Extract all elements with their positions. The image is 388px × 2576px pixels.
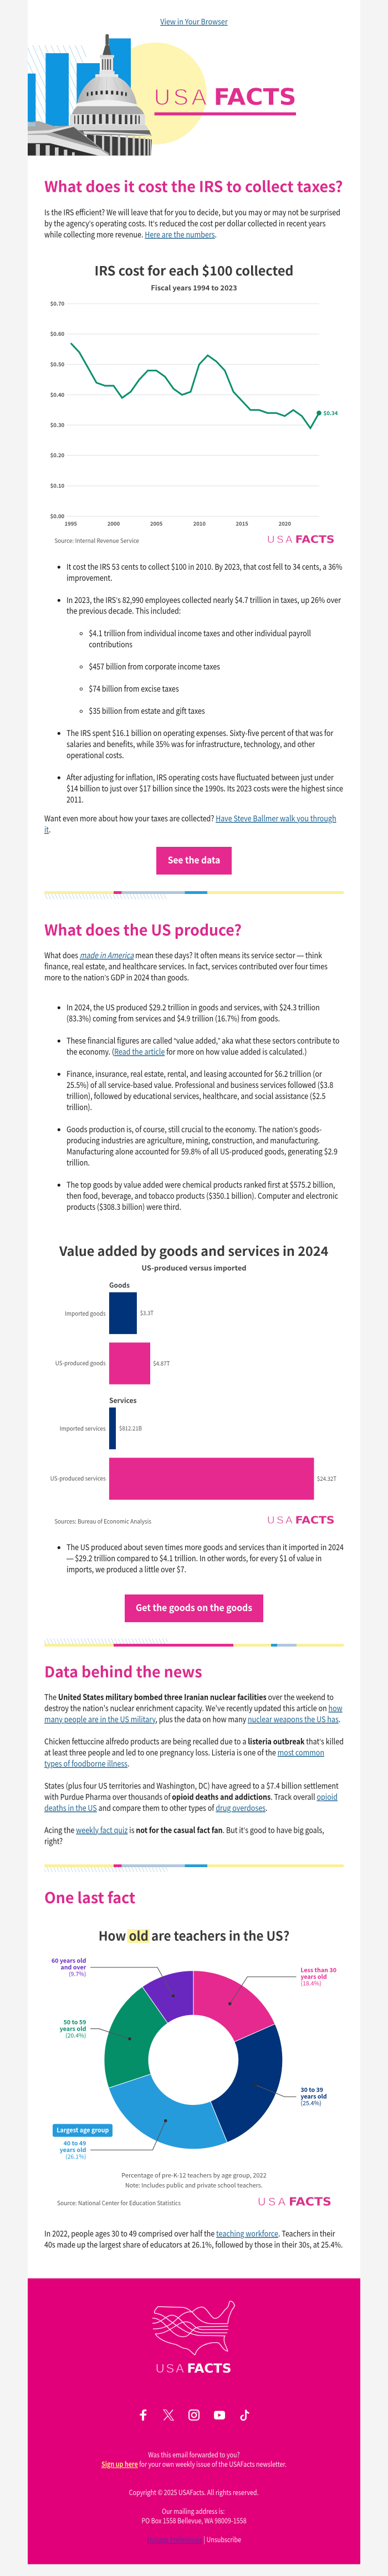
logo: USAFacts: USA: [154, 84, 207, 110]
footer text: address: PO Box 1558 Bellevue, WA 98009-1558: [141, 2515, 247, 2526]
bullet list: trillion).: [67, 1101, 92, 1113]
logo: USAFacts small: USA: [258, 2196, 286, 2209]
section: One last fact: [44, 1886, 343, 2250]
label: 30 to 39: 30 to 39: [300, 2086, 323, 2094]
news item: Iran: many people are in the US military, plus the data on how many nuclear weapons the US has.: [44, 1714, 340, 1725]
closing text: 40s made up the largest share of educators at 26.1%, followed by those in their 30s, at 25.4%.: [44, 2239, 343, 2250]
news item: listeria: types of foodborne illness.: [44, 1758, 130, 1769]
footer text: address: Our mailing address is:: [162, 2506, 224, 2516]
source: Source: Internal Revenue Service: [54, 537, 139, 545]
news item: listeria: Chicken fettuccine alfredo products are being recalled due to a listeria outbreak that’s killed: [44, 1736, 344, 1747]
label: 50 to 59: years old: [60, 2025, 86, 2033]
intro text: by the agency’s operating costs. It’s reduced the cost per dollar collected in recent years: [44, 217, 326, 229]
news item: listeria: [44, 1736, 344, 1769]
bullet list: [58, 561, 343, 805]
label: 50 to 59: 50 to 59: [64, 2018, 86, 2026]
bullet list: Manufacturing alone accounted for 59.8% of all US-produced goods, generating $2.9: [67, 1146, 338, 1157]
chart title: How old are teachers in the US?: [99, 1926, 289, 1945]
news item: quiz: Acing the weekly fact quiz is not for the casual fact fan. But it’s good to have big goals,: [44, 1824, 324, 1836]
source: Source: National Center for Education Statistics: [57, 2199, 181, 2207]
end point marker: [316, 411, 321, 416]
bullet list: operational costs.: [67, 749, 124, 761]
label: 40 to 49: years old: [60, 2146, 86, 2154]
y axis labels: $0.00: [50, 512, 65, 520]
bullet list: It cost the IRS 53 cents to collect $100 in 2010. By 2023, that cost fell to 34 cents, a 36%: [67, 561, 342, 573]
logo: USAFacts small: FACTS: [289, 2195, 331, 2209]
intro text: [44, 206, 340, 240]
label: 30 to 39: (25.4%): [300, 2099, 321, 2107]
heading: What does the US produce?: [44, 918, 242, 940]
news item: quiz: [44, 1824, 324, 1847]
bar: imported services: [60, 1408, 142, 1449]
bullet: — $29.2 trillion compared to $4.1 trillion. In other words, for every $1 of value in: [67, 1552, 321, 1564]
label: less than 30: [300, 1966, 336, 1987]
bullet list: These financial figures are called “value added,” aka what these sectors contribute to: [67, 1035, 340, 1046]
line chart: IRS cost for each $100 collected: [50, 260, 338, 546]
bullet list: Goods production is, of course, still crucial to the economy. The nation’s goods-: [67, 1123, 321, 1135]
bullet list: trillion), followed by educational services, healthcare, and social assistance ($2.5: [67, 1090, 326, 1102]
x axis labels: 1995: [64, 519, 77, 527]
source: Sources: Bureau of Economic Analysis: [54, 1517, 151, 1526]
donut segments: [104, 1971, 283, 2149]
label: 40 to 49: 40 to 49: [64, 2139, 86, 2148]
label: 30 to 39: years old: [300, 2092, 327, 2100]
logo: USAFacts small: FACTS: [295, 534, 335, 546]
chart title: IRS cost for each $100 collected: [94, 260, 294, 279]
end value label: $0.34: [324, 409, 338, 417]
bullet list: $14 billion to just over $17 billion since the 1990s. Its 2023 costs were the highest since: [67, 783, 343, 794]
title highlight: [127, 1929, 150, 1943]
bullet list: contributions: [89, 638, 132, 650]
bullet list: In 2023, the IRS’s 82,990 employees collected nearly $4.7 trillion in taxes, up 26% over: [67, 594, 341, 606]
bar: imported services: Imported services: [60, 1425, 106, 1433]
news item: Iran: destroy the nation's nuclear enrichment capacity. We've recently updated this article on how: [44, 1703, 343, 1714]
intro text: What does made in America mean these days? It often means its service sector — think: [44, 949, 322, 961]
label: less than 30: years old: [300, 1972, 327, 1981]
x axis labels: 2010: [193, 519, 206, 527]
bar: US-produced goods: $4.87T: [153, 1359, 170, 1368]
label: 60 and over: 60 years old: [52, 1956, 86, 1965]
header banner: [28, 34, 296, 156]
divider: [44, 1864, 344, 1872]
badge: largest age group: Largest age group: [57, 2126, 109, 2135]
view in browser link: View in Your Browser: [160, 16, 228, 27]
bar: US-produced goods: [55, 1342, 170, 1384]
bullet list: 2011.: [67, 794, 84, 805]
group label: services: Services: [109, 1394, 136, 1405]
footer text: forwarded: Was this email forwarded to you?: [148, 2449, 240, 2460]
icon: youtube: [214, 2411, 225, 2420]
logo: USAFacts: [154, 84, 296, 115]
bullet list: After adjusting for inflation, IRS operating costs have fluctuated between just under: [67, 771, 334, 783]
bullet list: $74 billion from excise taxes: [89, 683, 179, 694]
bullet list: Finance, insurance, real estate, rental, and leasing accounted for $6.2 trillion (or: [67, 1068, 322, 1080]
data line: [71, 343, 319, 428]
hatch backdrop: [28, 45, 86, 123]
bar: imported goods: $3.3T: [140, 1309, 154, 1317]
logo: USAFacts small: FACTS: [295, 1515, 335, 1526]
donut chart: teacher ages: [52, 1926, 336, 2209]
intro text: finance, real estate, and healthcare services. In fact, services contributed over four times: [44, 960, 328, 972]
bullet: imports, we produced a little over $7.: [67, 1563, 186, 1575]
intro text: while collecting more revenue. Here are the numbers.: [44, 228, 217, 240]
news item: opioids: [44, 1780, 339, 1813]
footer text: copyright: Copyright © 2025 USAFacts. All rights reserved.: [129, 2487, 258, 2497]
follow-up text: Want even more about how your taxes are collected? Have Steve Ballmer walk you through: [44, 812, 336, 824]
label: 60 and over: and over: [60, 1963, 86, 1971]
button: see the data: See the data: [168, 853, 220, 866]
logo: USAFacts small: USA: [267, 534, 293, 545]
y axis labels: $0.30: [50, 421, 65, 428]
logo: USAFacts small: [258, 2195, 331, 2209]
logo: USAFacts white: USA: [156, 2362, 184, 2375]
chart notes: [121, 2171, 267, 2190]
chart subtitle: US-produced versus imported: [141, 1263, 247, 1273]
chart title: Value added by goods and services in 2024: [59, 1241, 328, 1260]
x axis labels: 2005: [150, 519, 163, 527]
section: Data behind the news: [44, 1660, 344, 1847]
bullet list: then food, beverage, and tobacco products ($350.1 billion). Computer and electronic: [67, 1190, 338, 1202]
bullet list: improvement.: [67, 572, 113, 584]
news item: Iran: [44, 1691, 343, 1725]
button: see the data: [156, 847, 232, 875]
y axis labels: $0.50: [50, 360, 65, 368]
label: less than 30: Less than 30: [300, 1966, 336, 1974]
divider: [44, 1638, 344, 1647]
closing text: [44, 2228, 343, 2250]
footer text: forwarded: [101, 2449, 287, 2469]
bullet list: salaries and benefits, while 35% was for infrastructure, technology, and other: [67, 738, 315, 750]
heading: What does it cost the IRS to collect taxes?: [44, 175, 343, 197]
y axis labels: $0.20: [50, 451, 65, 459]
label: 50 to 59: [60, 2018, 86, 2040]
news item: opioids: deaths in the US and compare them to other types of drug overdoses.: [44, 1802, 268, 1813]
icon: X: [164, 2410, 173, 2420]
bullet list: trillion.: [67, 1157, 90, 1168]
x axis labels: 2015: [236, 519, 248, 527]
bar: imported goods: Imported goods: [65, 1310, 106, 1318]
footer links: Manage Preferences | Unsubscribe: [147, 2534, 241, 2544]
bullet list: products ($308.3 billion) were third.: [67, 1201, 181, 1213]
icon: USA map logo: [152, 2301, 234, 2355]
bullet list: the previous decade. This included:: [67, 605, 181, 617]
bar: US-produced services: US-produced services: [50, 1475, 106, 1483]
heading: Data behind the news: [44, 1660, 202, 1681]
footer text: forwarded: Sign up here for your own weekly issue of the USAFacts newsletter.: [101, 2459, 287, 2469]
yellow circle: [105, 43, 207, 145]
bullet list: producing industries are agriculture, mining, construction, and manufacturing.: [67, 1134, 320, 1146]
logo: USAFacts white: FACTS: [187, 2362, 231, 2376]
bullet list: In 2024, the US produced $29.2 trillion in goods and services, with $24.3 trillion: [67, 1001, 320, 1013]
label: 60 and over: [52, 1956, 86, 1978]
follow-up text: [44, 812, 336, 835]
y axis labels: $0.40: [50, 391, 65, 398]
badge: largest age group: [53, 2124, 113, 2137]
y axis labels: [50, 299, 65, 520]
news item: quiz: right?: [44, 1836, 63, 1847]
bullet list: $457 billion from corporate income taxes: [89, 661, 220, 672]
bullet list: The top goods by value added were chemical products ranked first at $575.2 billion,: [67, 1179, 335, 1190]
news item: Iran: The United States military bombed three Iranian nuclear facilities over the weekend to: [44, 1691, 334, 1703]
icon: tiktok: [241, 2410, 249, 2420]
x axis labels: [64, 519, 291, 527]
logo: USAFacts small: [267, 1514, 335, 1526]
news item: listeria: at least three people and led to one pregnancy loss. Listeria is one of the most common: [44, 1747, 324, 1758]
bullet list: (83.3%) coming from services and $4.9 trillion (16.7%) from goods.: [67, 1013, 280, 1024]
logo: USAFacts white: [156, 2362, 231, 2376]
intro text: [44, 949, 328, 983]
footer text: address: [141, 2506, 247, 2526]
bullet list: [58, 1001, 340, 1213]
bullet: [58, 1541, 344, 1575]
bullet list: $35 billion from estate and gift taxes: [89, 705, 205, 717]
bar: US-produced goods: US-produced goods: [55, 1359, 106, 1367]
bar: imported goods: [65, 1292, 154, 1334]
bullet list: $4.1 trillion from individual income taxes and other individual payroll: [89, 627, 311, 639]
bullet: The US produced about seven times more goods and services than it imported in 2024: [67, 1541, 344, 1553]
y axis labels: $0.60: [50, 330, 65, 338]
button: get the goods: Get the goods on the goods: [136, 1601, 252, 1614]
icon: facebook: [140, 2410, 146, 2421]
label: 50 to 59: (20.4%): [65, 2032, 86, 2040]
label: less than 30: (18.4%): [300, 1979, 321, 1987]
illustration: capitol and bars: [28, 34, 152, 156]
button: get the goods: [125, 1594, 263, 1622]
label: 60 and over: (9.7%): [69, 1970, 86, 1978]
bullet list: the economy. (Read the article for more on how value added is calculated.): [67, 1046, 307, 1057]
bar: US-produced services: [50, 1458, 336, 1500]
label: 40 to 49: (26.1%): [65, 2153, 86, 2161]
logo: USAFacts: FACTS: [214, 84, 296, 110]
leader lines: [90, 1967, 296, 2150]
x axis labels: 2020: [279, 519, 291, 527]
news item: opioids: States (plus four US territories and Washington, DC) have agreed to a $7.4 billion settlement: [44, 1780, 339, 1791]
bullet list: 25.5%) of all service-based value. Professional and business services followed ($3.8: [67, 1079, 333, 1091]
section: What does the US produce: [44, 918, 344, 1622]
bar: US-produced services: $24.32T: [317, 1475, 336, 1483]
bar chart: value added by goods and services: [50, 1241, 336, 1526]
divider: [44, 891, 344, 899]
label: 40 to 49: [60, 2139, 86, 2161]
logo: USAFacts small: USA: [267, 1514, 293, 1526]
label: 30 to 39: [300, 2086, 327, 2107]
bullet list: The IRS spent $16.1 billion on operating expenses. Sixty-five percent of that was for: [67, 727, 334, 739]
closing text: In 2022, people ages 30 to 49 comprised over half the teaching workforce. Teachers in their: [44, 2228, 335, 2239]
section: IRS cost: [44, 175, 343, 875]
group label: goods: Goods: [109, 1279, 130, 1290]
heading: One last fact: [44, 1886, 135, 1908]
logo: USAFacts small: [267, 534, 335, 546]
y axis labels: $0.10: [50, 482, 65, 489]
follow-up text: it.: [44, 824, 51, 835]
footer: [28, 2278, 360, 2564]
icon: instagram: [189, 2410, 199, 2420]
chart notes: Percentage of pre-K-12 teachers by age group, 2022: [121, 2171, 267, 2180]
y axis labels: $0.70: [50, 299, 65, 307]
news item: opioids: with Purdue Pharma over thousands of opioid deaths and addictions. Track overall opioid: [44, 1791, 338, 1802]
chart notes: Note: Includes public and private school teachers.: [125, 2181, 263, 2190]
intro text: more to the nation’s GDP in 2024 than goods.: [44, 972, 189, 983]
chart subtitle: Fiscal years 1994 to 2023: [151, 282, 237, 293]
intro text: Is the IRS efficient? We will leave that for you to decide, but you may or may not be surprised: [44, 206, 340, 218]
bar: imported services: $812.21B: [119, 1424, 142, 1433]
x axis labels: 2000: [108, 519, 120, 527]
